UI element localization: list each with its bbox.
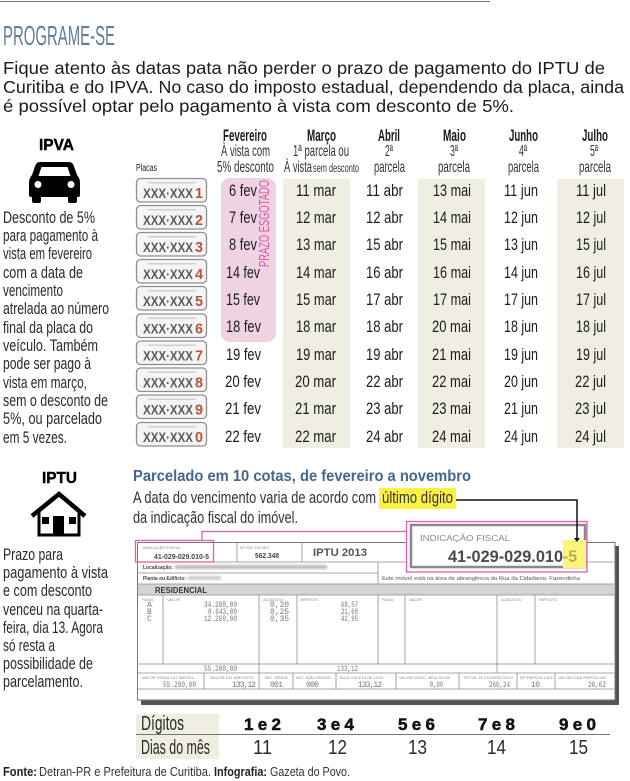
dates: maio: 21 mai (432, 346, 471, 364)
license plates: XXX·XXX (143, 186, 193, 201)
table: digits and days: 11 (253, 737, 272, 759)
callout: magnified fiscal indication: -5 (563, 547, 577, 566)
dates: maio: 20 mai (432, 318, 471, 336)
table: digits and days: 5 e 6 (398, 715, 435, 734)
dates: maio: 22 mai (432, 373, 471, 391)
dates: julho: 22 jul (575, 373, 606, 391)
dates: julho: 12 jul (576, 209, 606, 227)
table headers: 3ª (450, 143, 458, 160)
dates: junho: 13 jun (504, 236, 538, 254)
dates: fevereiro: 14 fev (226, 264, 261, 282)
tax document: 562.348 (255, 551, 279, 560)
tax document: INC. NÃO RESID. (296, 675, 332, 680)
tax document: Nº PARCELAS (520, 675, 553, 680)
tax document: VALOR VENAL DO IMÓVEL (142, 675, 195, 680)
dates: março: 21 mar (295, 400, 336, 418)
IPTU text: Prazo para (3, 546, 64, 564)
dates: março: 12 mar (296, 209, 336, 227)
dates: julho (575, 182, 606, 446)
text: data do vencimento: da indicação fiscal do imóvel. (133, 508, 298, 527)
license plates: 4 (195, 266, 204, 283)
tax document: 001 (270, 681, 283, 690)
IPTU text: venceu na quarta- (3, 601, 103, 619)
dates: abril: 15 abr (366, 236, 403, 254)
dates: maio: 16 mai (433, 264, 471, 282)
license plates: 3 (195, 239, 203, 256)
callout: magnified fiscal indication: 41-029-029.010 (448, 547, 563, 566)
IPVA text: pode ser pago à (3, 355, 92, 373)
tax document: INC. RESID. (265, 675, 289, 680)
dates: junho: 20 jun (504, 373, 538, 391)
table: digits and days: 9 e 0 (559, 715, 596, 734)
dates: junho: 24 jun (504, 428, 538, 446)
license plates: XXX·XXX (143, 376, 193, 390)
dates: maio (432, 182, 471, 446)
source line: Gazeta do Povo. (270, 764, 350, 779)
dates: março: 22 mar (295, 428, 336, 446)
table headers: Julho (582, 126, 608, 145)
dates: maio: 23 mai (432, 400, 471, 418)
tax document: 55.200,00 (163, 681, 196, 690)
IPTU text (3, 546, 109, 691)
IPVA text: sem o desconto de (3, 392, 108, 410)
license plates: XXX·XXX (143, 430, 193, 445)
dates: março: 13 mar (296, 236, 336, 254)
dates: março: 11 mar (296, 182, 336, 200)
table headers: Maio (443, 126, 466, 145)
dates: abril: 11 abr (366, 182, 403, 200)
license plates: XXX·XXX (143, 267, 193, 282)
dates: julho: 16 jul (576, 264, 606, 282)
tax document: 0,25 (270, 608, 289, 617)
prazo esgotado label: PRAZO ESGOTADO (257, 180, 273, 267)
table headers: 4ª (519, 143, 527, 160)
source line (3, 764, 350, 779)
dates: maio: 24 mai (432, 428, 471, 446)
table headers: parcela (374, 159, 405, 176)
dates: julho: 24 jul (575, 428, 606, 446)
tax document: 55.200,00 (204, 665, 237, 674)
dates: junho: 17 jun (504, 291, 538, 309)
dates: junho: 21 jun (504, 400, 538, 418)
text: data do vencimento (133, 488, 456, 527)
dates: julho: 11 jul (576, 182, 606, 200)
dates: março (295, 182, 336, 446)
tax document: 133,12 (337, 665, 358, 674)
tax document: 34.288,00 (204, 601, 237, 610)
table: digits and days: 14 (487, 737, 506, 759)
license plates: 7 (195, 348, 203, 364)
IPVA text: em 5 vezes. (3, 429, 67, 447)
arrow (456, 500, 580, 542)
intro text (3, 58, 624, 116)
table headers: Fevereiro (223, 126, 267, 145)
panel: IPVA description (3, 137, 109, 447)
tax document (138, 542, 619, 705)
icon: house (32, 494, 85, 535)
table headers: parcela (508, 159, 539, 176)
source line: Infografia: (214, 764, 267, 779)
license plates: XXX·XXX (143, 348, 193, 364)
callout: pink highlight and connector (136, 532, 406, 562)
table headers: À vista com (221, 141, 270, 160)
tax document: FAIXA (382, 597, 394, 602)
tax document: Nº DO TALÃO (240, 545, 269, 550)
heading: parcelado: Parcelado em 10 cotas, de fevereiro a novembro (133, 468, 471, 485)
tax document: Este imóvel está na área de abrangência da Rua da Cidadania: Fazendinha (382, 576, 581, 582)
IPVA text: veículo. Também (3, 337, 98, 355)
table headers: À vista (284, 157, 312, 176)
dates: abril: 19 abr (366, 346, 403, 364)
table headers: sem desconto (313, 163, 359, 175)
title: PROGRAME-SE (3, 20, 115, 51)
table headers: 5% desconto (217, 159, 274, 176)
heading: IPVA: IPVA (39, 137, 74, 154)
table headers: 2ª (385, 143, 393, 160)
license plates: XXX·XXX (143, 240, 193, 255)
tax document: 68,57 (341, 601, 358, 610)
IPTU text: pagamento à vista (3, 564, 109, 582)
tax document: 0,35 (270, 615, 289, 624)
license plates (136, 178, 206, 446)
tax document: TOTAL DO EXERCÍCIO (463, 675, 513, 680)
table headers: Abril (378, 126, 400, 145)
tax document: FAIXA (142, 597, 154, 602)
dates: abril: 23 abr (366, 400, 403, 418)
table headers: 1ª parcela ou (293, 143, 349, 160)
text: data do vencimento: A data do vencimento varia de acordo com (133, 488, 376, 507)
dates: julho: 23 jul (575, 400, 606, 418)
dates: abril: 24 abr (366, 428, 403, 446)
IPTU text: parcelamento. (3, 673, 83, 691)
dates: junho: 14 jun (504, 264, 538, 282)
dates: julho: 17 jul (576, 291, 606, 309)
tax document: 266,24 (489, 681, 510, 690)
IPVA text: 5%, ou parcelado (3, 410, 102, 428)
dates: abril (366, 182, 403, 446)
tax document: VALOR DO IMPOSTO (210, 675, 254, 680)
tax document: 42,95 (341, 615, 358, 624)
table headers: Março (307, 126, 336, 145)
dates: junho: 19 jun (504, 346, 538, 364)
tax document: Planta ou Edifício: (143, 576, 186, 582)
callout: magnified fiscal indication (406, 522, 587, 572)
callout: magnified fiscal indication: INDICAÇÃO FISCAL (420, 533, 510, 543)
dates: fevereiro: 6 fev (229, 182, 258, 200)
source line: Fonte: (3, 764, 37, 779)
dates: julho: 15 jul (576, 236, 606, 254)
tax document: 12.269,00 (204, 615, 237, 624)
tax document: TAXA COLETA DE LIXO (339, 675, 383, 680)
table: digits and days: Dias do mês (141, 737, 210, 759)
IPVA text: vencimento (3, 282, 63, 300)
table: digits and days: Dígitos (141, 713, 184, 735)
table: digits and days (136, 713, 610, 759)
tax document: C (147, 615, 152, 624)
license plates: 0 (195, 429, 203, 446)
IPVA text (3, 209, 109, 447)
dates: fevereiro: 19 fev (226, 346, 262, 364)
IPTU text: feira, dia 13. Agora (3, 619, 104, 637)
dates: março: 15 mar (296, 291, 336, 309)
tax document: 10 (531, 681, 540, 690)
tax document: 000 (306, 681, 319, 690)
table: digits and days: 15 (569, 737, 588, 759)
panel: IPTU description (3, 470, 109, 691)
dates: fevereiro: 21 fev (225, 400, 262, 418)
text: data do vencimento: último dígito (382, 488, 453, 507)
dates: junho: 18 jun (504, 318, 538, 336)
tax document: IPTU 2013 (313, 547, 367, 559)
dates: maio: 13 mai (433, 182, 471, 200)
license plates: 5 (195, 293, 203, 310)
IPTU text: e com desconto (3, 582, 92, 600)
tax document: 41-029-029.010-5 (154, 552, 209, 561)
dates: junho: 12 jun (504, 209, 538, 227)
dates: fevereiro: 22 fev (225, 428, 262, 446)
column backgrounds (221, 178, 624, 448)
tax document: A (147, 601, 152, 610)
table headers: parcela (438, 159, 470, 176)
license plates: 6 (195, 320, 203, 338)
IPVA text: vista em fevereiro (3, 245, 92, 263)
tax document: IMPOSTO (539, 597, 557, 602)
table headers (136, 126, 611, 176)
dates: fevereiro (225, 182, 262, 446)
tax document: VALOR DESC. BOA NOTA (399, 675, 450, 680)
dates: fevereiro: 18 fev (226, 318, 262, 336)
IPVA text: Desconto de 5% (3, 209, 95, 227)
intro text: Curitiba e do IPVA. No caso do imposto estadual, dependendo da placa, ainda (3, 77, 624, 97)
license plates: 8 (195, 374, 203, 392)
tax document: VALOR DAS PARCELAS (558, 675, 606, 680)
icon: car (29, 162, 80, 203)
dates: abril: 12 abr (366, 209, 403, 227)
dates: julho: 19 jul (576, 346, 606, 364)
license plates: 9 (195, 402, 203, 418)
dates: abril: 17 abr (366, 291, 403, 309)
tax document: VALOR (167, 597, 180, 602)
license plates: 2 (195, 212, 203, 229)
dates: fevereiro: 15 fev (226, 291, 261, 309)
dates: abril: 18 abr (366, 318, 403, 336)
dates: junho (504, 182, 538, 446)
IPVA text: vista em março, (3, 374, 87, 392)
table: digits and days: 7 e 8 (478, 715, 515, 734)
table headers: Junho (509, 126, 538, 145)
license plates: XXX·XXX (143, 213, 193, 228)
table: digits and days: 3 e 4 (317, 715, 355, 734)
tax document: ALIQUOTA (263, 597, 283, 602)
license plates: 1 (195, 185, 203, 202)
tax document: Localização: (143, 565, 173, 571)
dates: março: 19 mar (296, 346, 336, 364)
tax document: VALOR (409, 597, 422, 602)
dates: abril: 22 abr (366, 373, 403, 391)
table headers: 5ª (590, 143, 598, 160)
IPVA text: com a data de (3, 264, 83, 282)
dates: abril: 16 abr (366, 264, 403, 282)
tax document: ALIQUOTA (501, 597, 521, 602)
dates: março: 14 mar (296, 264, 336, 282)
dates: julho: 18 jul (576, 318, 606, 336)
IPVA text: atrelada ao número (3, 300, 109, 318)
dates: março: 20 mar (295, 373, 336, 391)
IPVA text: para pagamento à (3, 227, 99, 245)
dates: fevereiro: 20 fev (225, 373, 262, 391)
dates: março: 18 mar (296, 318, 336, 336)
tax document: 0,20 (270, 601, 289, 610)
source line: Detran-PR e Prefeitura de Curitiba. (39, 764, 211, 779)
dates: fevereiro: 8 fev (229, 236, 258, 254)
dates: junho: 11 jun (504, 182, 538, 200)
tax document: 0,00 (430, 681, 443, 690)
table: digits and days: 12 (328, 737, 347, 759)
tax document: 8.643,00 (208, 608, 237, 617)
tax document: RESIDENCIAL (155, 586, 207, 595)
heading: IPTU: IPTU (42, 470, 77, 487)
license plates: XXX·XXX (143, 294, 193, 309)
tax document: 26,62 (588, 681, 606, 690)
dates: maio: 15 mai (433, 236, 471, 254)
tax document: IMPOSTO (300, 597, 318, 602)
tax document: 133,12 (232, 681, 256, 690)
table: digits and days: 13 (408, 737, 427, 759)
tax document: 133,12 (358, 681, 382, 690)
table headers: parcela (579, 159, 611, 176)
intro text: é possível optar pelo pagamento à vista com desconto de 5%. (3, 96, 514, 116)
dates: fevereiro: 7 fev (229, 209, 258, 227)
tax document: INDICAÇÃO FISCAL (143, 545, 182, 550)
IPTU text: possibilidade de (3, 655, 93, 673)
license plates: XXX·XXX (143, 322, 193, 336)
table headers: Placas (136, 163, 157, 174)
IPVA text: final da placa do (3, 319, 93, 337)
intro text: Fique atento às datas pata não perder o prazo de pagamento do IPTU de (3, 58, 605, 78)
license plates: XXX·XXX (143, 402, 193, 418)
dates: maio: 17 mai (433, 291, 471, 309)
tax document: B (147, 608, 152, 617)
tax document: 21,60 (341, 608, 358, 617)
table: digits and days: 1 e 2 (244, 715, 281, 734)
dates: maio: 14 mai (433, 209, 471, 227)
IPTU text: só resta a (3, 637, 56, 655)
